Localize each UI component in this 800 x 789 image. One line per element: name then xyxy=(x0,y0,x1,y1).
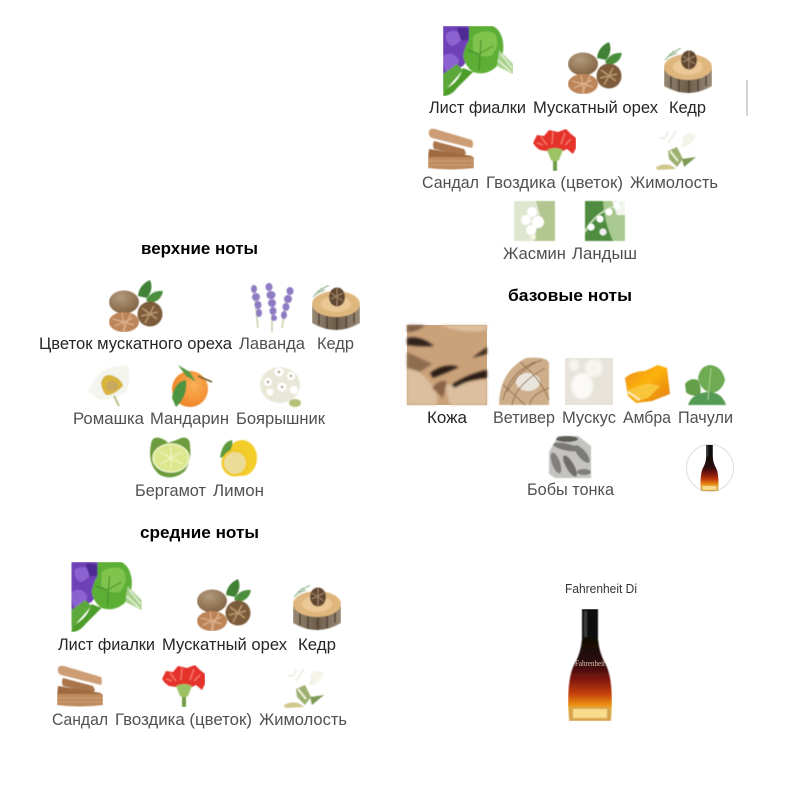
icon: nutmeg xyxy=(197,579,251,631)
label: carnation: Гвоздика (цветок) xyxy=(486,173,623,192)
scrollbar xyxy=(746,80,748,116)
icon: lavender xyxy=(251,283,294,332)
icon: sandal xyxy=(428,129,474,170)
icon: lemon xyxy=(220,440,257,476)
label: lavender: Лаванда xyxy=(239,334,306,353)
label: violet leaf: Лист фиалки xyxy=(58,635,155,654)
icon: amber xyxy=(625,365,670,403)
icon: bergamot xyxy=(150,438,190,477)
icon: violet leaf xyxy=(72,562,142,632)
label: nutmeg flower: Цветок мускатного ореха xyxy=(39,334,233,353)
icon: sandal xyxy=(57,666,103,706)
label: hawthorn: Боярышник xyxy=(236,409,326,428)
label: carnation: Гвоздика (цветок) xyxy=(115,710,252,729)
heading: base notes: базовые ноты xyxy=(508,286,632,305)
icon: cedar xyxy=(293,585,341,630)
label: bergamot: Бергамот xyxy=(135,481,206,500)
label: sandal: Сандал xyxy=(422,173,479,192)
icon: patchouli xyxy=(685,365,726,405)
label: sandal: Сандал xyxy=(52,710,108,729)
label: patchouli: Пачули xyxy=(678,408,733,427)
panel: middle notes continued xyxy=(422,26,718,263)
label: musk: Мускус xyxy=(562,408,616,427)
icon: perfume bottle xyxy=(568,609,612,721)
label: honeysuckle: Жимолость xyxy=(630,173,718,192)
label: mandarin: Мандарин xyxy=(150,409,229,428)
heading: top notes: верхние ноты xyxy=(141,239,258,258)
label: lily of the valley: Ландыш xyxy=(572,244,637,263)
label: amber: Амбра xyxy=(623,408,672,427)
icon: honeysuckle xyxy=(284,669,324,708)
panel: base notes xyxy=(407,325,734,499)
icon: violet leaf xyxy=(443,26,513,96)
icon: musk xyxy=(565,358,613,405)
icon: cedar xyxy=(312,285,360,330)
icon: mandarin xyxy=(172,365,212,407)
label: lemon: Лимон xyxy=(213,481,264,500)
icon: hawthorn xyxy=(260,367,301,407)
icon: carnation xyxy=(533,129,576,171)
label: nutmeg: Мускатный орех xyxy=(533,98,658,117)
icon: leather xyxy=(407,325,487,405)
icon: nutmeg xyxy=(568,42,622,94)
label: honeysuckle: Жимолость xyxy=(259,710,347,729)
icon: perfume bottle in circle xyxy=(686,444,734,492)
icon: honeysuckle xyxy=(656,131,696,170)
label: cedar: Кедр xyxy=(298,635,336,654)
label: nutmeg: Мускатный орех xyxy=(162,635,287,654)
icon: perfume bottle: Fahrenheit xyxy=(575,659,606,668)
label: cedar: Кедр xyxy=(317,334,354,353)
label: chamomile: Ромашка xyxy=(73,409,145,428)
icon: chamomile xyxy=(88,365,130,406)
icon: tonka beans xyxy=(548,436,592,478)
icon: cedar xyxy=(664,48,712,93)
perfume name: Fahrenheit Di xyxy=(565,582,637,596)
label: tonka beans: Бобы тонка xyxy=(527,480,615,499)
heading: middle notes: средние ноты xyxy=(140,523,259,542)
label: jasmine: Жасмин xyxy=(503,244,566,263)
panel: middle notes xyxy=(52,562,347,729)
label: vetiver: Ветивер xyxy=(493,408,555,427)
icon: vetiver xyxy=(499,358,549,405)
label: violet leaf: Лист фиалки xyxy=(429,98,526,117)
label: leather: Кожа xyxy=(427,408,468,427)
label: cedar: Кедр xyxy=(669,98,706,117)
icon: lily of the valley xyxy=(585,201,625,241)
icon: nutmeg flower xyxy=(109,280,163,332)
icon: carnation xyxy=(162,665,205,707)
icon: jasmine xyxy=(514,201,555,241)
panel: top notes xyxy=(39,280,360,500)
